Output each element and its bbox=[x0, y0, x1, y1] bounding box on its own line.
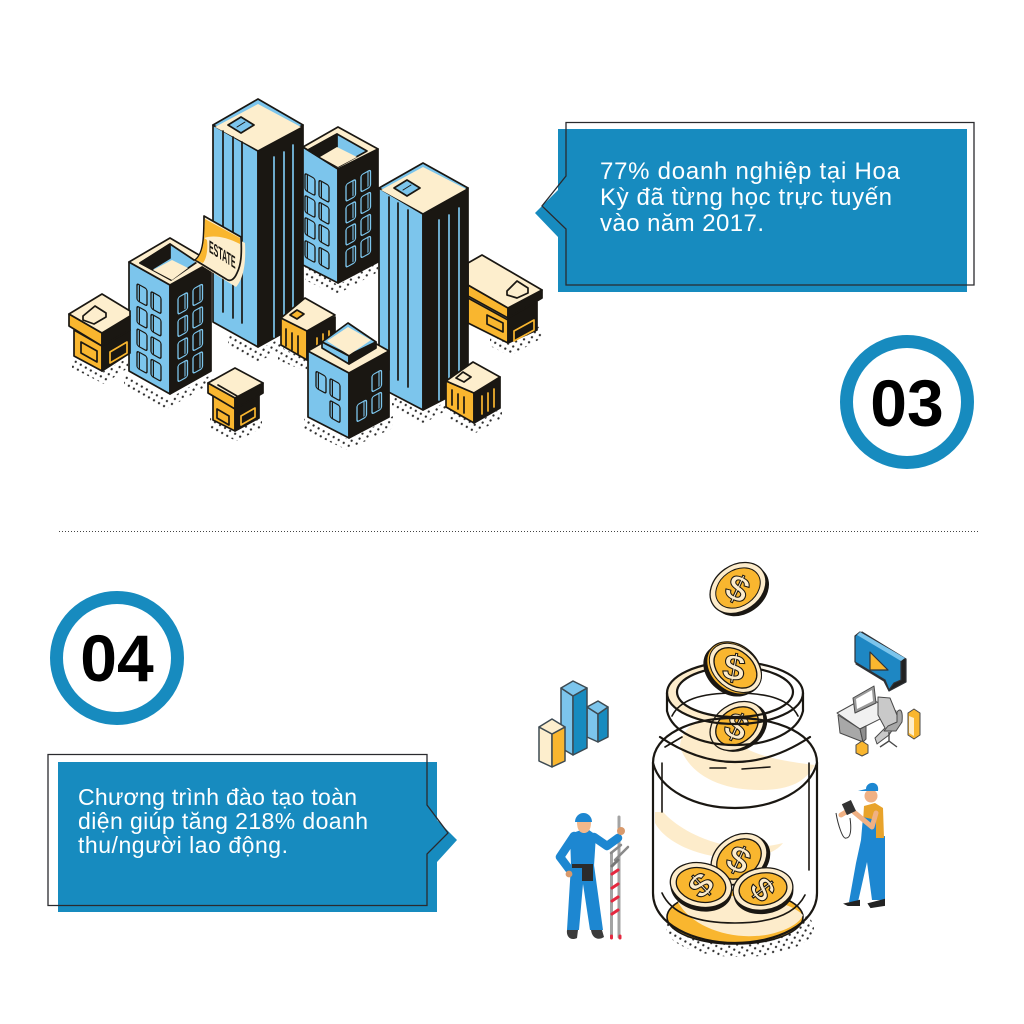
bib blue bbox=[861, 817, 876, 840]
worker helmet bbox=[575, 813, 592, 822]
worker face and collar bbox=[577, 822, 591, 833]
ground shadows bbox=[72, 262, 542, 450]
coin: stack left: $ bbox=[682, 865, 722, 906]
worker torso bbox=[570, 830, 596, 866]
coin: stack left bbox=[665, 857, 737, 917]
worker arms bbox=[560, 836, 618, 869]
figure: worker with meter bbox=[836, 783, 885, 907]
coin: stack right bbox=[730, 864, 796, 918]
building: low block with rooftop bbox=[308, 323, 389, 438]
chair bbox=[884, 710, 902, 731]
coin: stack back: $ bbox=[720, 838, 757, 883]
callout 04 text: thu/người lao động. bbox=[78, 832, 288, 858]
cap bbox=[858, 783, 878, 791]
small yellow cylinder bbox=[856, 741, 868, 756]
jar outline bbox=[653, 662, 817, 943]
building: small yellow box right bbox=[446, 362, 500, 423]
icon: bar chart blocks bbox=[539, 681, 608, 767]
icon: desk with seated worker bbox=[837, 686, 920, 756]
desk bbox=[837, 697, 896, 729]
coin: stack back bbox=[701, 822, 780, 898]
building: tall tower left bbox=[213, 99, 303, 347]
illustration: glass jar with coins bbox=[653, 551, 817, 957]
banner: estate sign bbox=[194, 216, 245, 287]
coin: inside jar neck bbox=[701, 690, 777, 763]
arm bbox=[841, 812, 876, 827]
badge 04 bbox=[56, 598, 178, 718]
building: blue block with windows bbox=[129, 238, 211, 394]
callout 04 bbox=[48, 754, 457, 912]
coin: top: $ bbox=[719, 567, 756, 612]
worker legs bbox=[567, 865, 603, 930]
coin: falling into jar: $ bbox=[720, 647, 748, 690]
panel: city illustration bbox=[69, 99, 542, 450]
badge 03 bbox=[846, 342, 968, 462]
banner: estate sign: ESTATE bbox=[209, 237, 236, 273]
building: mid-rise back bbox=[303, 127, 378, 283]
monitor bbox=[853, 686, 876, 713]
building: small yellow box centre bbox=[208, 368, 263, 431]
figure: worker with ladder bbox=[560, 813, 628, 939]
legs bbox=[849, 836, 885, 902]
badge 04: 04 bbox=[80, 621, 154, 695]
callout 03 text: Kỳ đã từng học trực tuyến bbox=[600, 184, 892, 211]
jar shadow bbox=[666, 899, 814, 957]
callout 03 text: vào năm 2017. bbox=[600, 210, 764, 237]
meter cable bbox=[836, 813, 851, 838]
coin: inside jar neck: $ bbox=[718, 705, 755, 750]
callout 03 text bbox=[600, 158, 901, 237]
callout 04 text bbox=[78, 784, 368, 858]
jar beige reflections bbox=[655, 662, 815, 858]
tall yellow cylinder bbox=[908, 709, 920, 739]
callout 03 text: 77% doanh nghiệp tại Hoa bbox=[600, 158, 901, 185]
building: small yellow box left bbox=[69, 294, 130, 371]
building: small yellow box middle bbox=[281, 298, 335, 360]
icon: speech bubble with play sign bbox=[855, 632, 906, 691]
coin: falling into jar bbox=[693, 630, 772, 708]
badge 03: 03 bbox=[870, 366, 944, 440]
building: large low box right bbox=[468, 255, 542, 343]
jar base disc bbox=[667, 890, 803, 944]
seated figure bbox=[875, 697, 899, 744]
shoes bbox=[846, 900, 884, 907]
section divider bbox=[59, 530, 978, 532]
callout 03 bbox=[535, 122, 974, 292]
worker belt and pouch bbox=[572, 864, 593, 881]
head bbox=[864, 790, 878, 802]
building: tall tower right bbox=[379, 163, 468, 410]
callout 04 text: Chương trình đào tạo toàn bbox=[78, 784, 357, 810]
callout 04 text: diện giúp tăng 218% doanh bbox=[78, 808, 368, 834]
worker hands bbox=[566, 827, 625, 877]
torso orange bbox=[862, 803, 884, 838]
coin: stack right: $ bbox=[742, 871, 782, 908]
coin: top bbox=[700, 551, 779, 627]
ladder bbox=[611, 817, 628, 938]
worker boots bbox=[567, 930, 604, 939]
meter bbox=[842, 800, 856, 815]
